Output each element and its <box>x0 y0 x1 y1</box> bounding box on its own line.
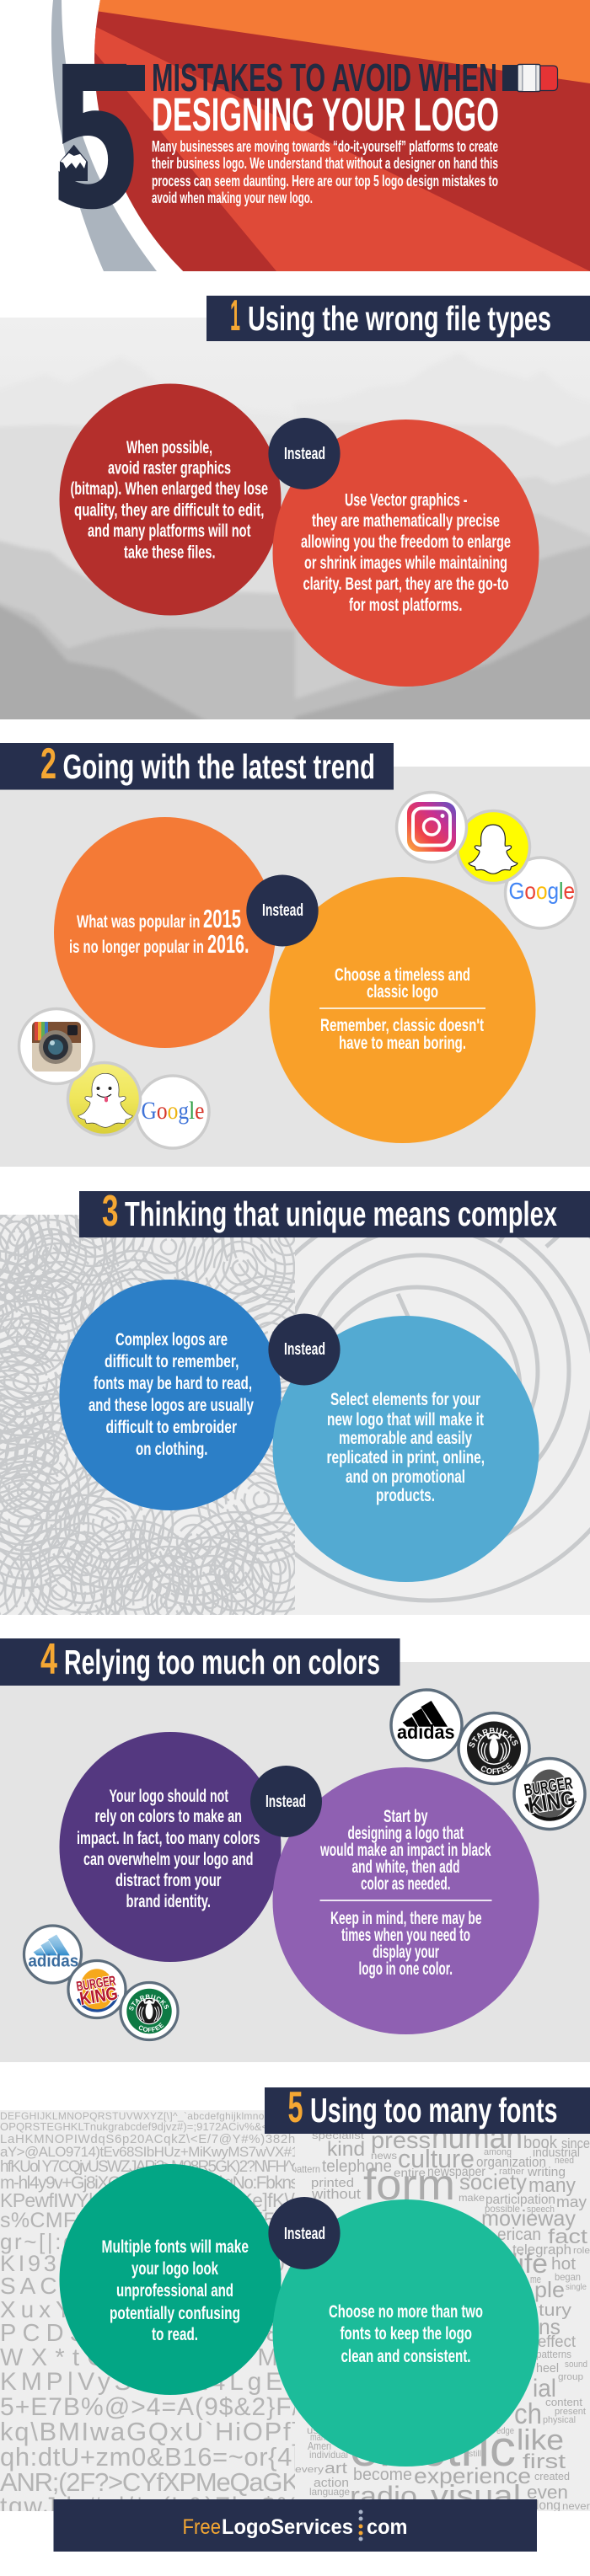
mistake text <box>69 904 249 959</box>
instead badge <box>268 418 341 489</box>
typography background: PCDS/KLhY5rGv8e <box>0 2320 299 2347</box>
heading banner: 4 <box>40 1635 57 1684</box>
icon: current google logo <box>506 858 577 928</box>
typography background: art <box>324 2460 347 2477</box>
typography background: s%CMF>GWLv|@x3}rS%uj5Lq <box>0 2209 299 2232</box>
typography background: industrial <box>533 2146 580 2160</box>
heading banner: 3 <box>102 1187 118 1236</box>
typography background: form <box>363 2161 455 2210</box>
icon: pencil eraser <box>502 64 558 91</box>
heading banner <box>79 1187 590 1237</box>
typography background: present <box>555 2407 586 2417</box>
typography background: XuxYaks"F2mW9pVd <box>0 2296 299 2322</box>
circle: solution <box>273 2199 539 2466</box>
panel: mistake 1 wrong file types <box>0 291 590 733</box>
typography background: individual <box>309 2449 348 2461</box>
typography background: edge <box>496 2426 514 2436</box>
icon: current snapchat logo <box>457 810 529 883</box>
typography background: hot <box>551 2255 576 2274</box>
typography background: single <box>566 2283 587 2292</box>
typography background: visual <box>431 2478 521 2513</box>
icon: colour starbucks <box>119 1981 180 2042</box>
typography background: KI93|/R$um7bQw2Yx0s <box>0 2251 299 2276</box>
typography background: news <box>371 2150 397 2162</box>
footer brand bar: LogoServices <box>222 2515 353 2539</box>
typography background: tqwJdc#g|/*u(L&)Zko$% <box>0 2493 299 2520</box>
typography background: organization <box>476 2154 546 2170</box>
solution text <box>327 1390 485 1505</box>
mistake text: (bitmap). When enlarged they lose <box>71 479 268 499</box>
typography background: like <box>517 2424 564 2456</box>
solution text <box>329 2302 483 2366</box>
icon: black and white starbucks: COFFEE <box>480 1762 512 1774</box>
solution text: Remember, classic doesn't <box>320 1016 484 1035</box>
heading banner: Going with the latest trend <box>62 747 375 786</box>
typography background: WX*tOn3QjBf7Mu <box>0 2344 299 2371</box>
panel: mistake 2 latest trend <box>0 740 590 1167</box>
instead badge: Instead <box>284 2225 325 2243</box>
typography background: ch <box>514 2398 542 2430</box>
heading banner <box>206 291 590 341</box>
typography background: every <box>295 2465 324 2475</box>
icon: current instagram logo <box>396 792 467 863</box>
circle: solution <box>270 877 536 1143</box>
typography background: ial <box>533 2375 556 2402</box>
instead badge <box>268 2197 341 2269</box>
typography background: 5+E7B%@>4=A(9$&2}F/ <box>0 2393 300 2421</box>
typography background: experience <box>414 2463 531 2488</box>
typography background: began <box>555 2271 581 2283</box>
icon: black and white adidas: adidas <box>397 1721 455 1743</box>
solution text: memorable and easily <box>339 1429 472 1448</box>
circle: mistake <box>59 1732 282 1962</box>
mistake text: difficult to embroider <box>106 1418 237 1437</box>
solution text: fonts to keep the logo <box>341 2324 472 2344</box>
typography background: me <box>530 2273 541 2285</box>
typography background: us <box>307 2424 319 2436</box>
typography background: writing <box>527 2165 566 2179</box>
solution text: products. <box>376 1486 435 1505</box>
typography background: never <box>562 2500 590 2512</box>
icon: old instagram logo <box>19 1009 94 1083</box>
typography background: telephone <box>322 2157 392 2176</box>
solution text: have to mean boring. <box>339 1034 466 1053</box>
typography background: LaHKMNOPIWdqS6p20ACqkZ\<E/7@Y#%)382ht <box>0 2132 300 2146</box>
solution text <box>319 1807 492 1979</box>
mistake text: avoid raster graphics <box>108 458 231 478</box>
section background <box>0 767 590 1167</box>
mistake text <box>101 2237 249 2344</box>
typography background: DEFGHIJKLMNOPQRSTUVWXYZ[\]^_`abcdefghijklmnopqrstuv <box>0 2110 299 2122</box>
typography background: content <box>545 2396 582 2408</box>
intro paragraph: avoid when making your new logo. <box>152 189 313 206</box>
icon: black and white starbucks: STARBUCKS <box>469 1728 518 1748</box>
mistake text: your logo look <box>131 2259 218 2279</box>
circle: mistake <box>54 817 276 1048</box>
typography background: among <box>484 2147 512 2157</box>
panel: header <box>48 0 590 286</box>
typography background <box>0 2110 590 2520</box>
decorative grey arc <box>51 0 157 271</box>
typography background: rather <box>499 2167 524 2177</box>
typography background: may <box>556 2194 587 2210</box>
typography background: role <box>573 2246 590 2256</box>
typography background: effect <box>538 2333 577 2351</box>
icon: black and white burger king: KING <box>527 1786 577 1818</box>
mistake text: 2016. <box>207 929 249 959</box>
mistake text: and these logos are usually <box>88 1396 254 1415</box>
instead badge <box>246 874 319 947</box>
typography background: Ameri <box>308 2440 331 2452</box>
mistake text: fonts may be hard to read, <box>94 1374 252 1393</box>
typography background: patterns <box>536 2348 571 2360</box>
typography background: become <box>353 2466 412 2484</box>
typography background: human <box>432 2120 523 2156</box>
mistake text <box>77 1787 260 1911</box>
solution text: they are mathematically precise <box>312 511 500 531</box>
mistake text: to read. <box>152 2325 198 2344</box>
typography background: culture <box>398 2144 475 2173</box>
typography background: still <box>469 2450 481 2459</box>
icon: old snapchat logo <box>67 1063 140 1136</box>
typography background: entire <box>394 2166 426 2179</box>
panel: mistake 4 relying on colors <box>0 1635 590 2062</box>
typography background: tury <box>539 2301 571 2320</box>
solution text: clean and consistent. <box>341 2347 470 2366</box>
solution text: Use Vector graphics - <box>345 490 468 510</box>
icon: black and white burger king <box>514 1759 585 1830</box>
heading banner: 1 <box>230 291 240 340</box>
typography background: even <box>527 2482 568 2503</box>
typography background: possible <box>485 2203 520 2215</box>
mistake text: rely on colors to make an <box>94 1807 242 1826</box>
solution text: logo in one color. <box>359 1959 453 1979</box>
icon: colour burger king: BURGER <box>75 1973 117 1995</box>
solution text: classic logo <box>367 982 438 1002</box>
mistake text: and many platforms will not <box>88 521 251 541</box>
typography background: telegraph <box>512 2242 571 2258</box>
instead badge: Instead <box>262 901 303 920</box>
panel: mistake 3 unique means complex <box>0 1191 590 1615</box>
solution text: Keep in mind, there may be <box>330 1909 482 1928</box>
title <box>152 56 499 141</box>
typography background: SAC\1<B}kN4oTjf6Zq <box>0 2273 299 2299</box>
typography background: kind <box>327 2138 365 2161</box>
ring pattern background <box>0 1215 590 1615</box>
solution text: designing a logo that <box>347 1824 464 1843</box>
mistake text: Complex logos are <box>115 1330 228 1349</box>
typography background: society <box>459 2169 527 2194</box>
footer brand bar: com <box>367 2515 408 2539</box>
icon: colour burger king: KING <box>78 1982 119 2009</box>
circle: solution <box>273 1316 539 1582</box>
typography background: first <box>523 2450 566 2473</box>
mistake text: 2015 <box>203 904 241 933</box>
heading banner <box>265 2083 590 2134</box>
typography background: movieway <box>481 2205 576 2231</box>
typography background: qh:dtU+zm0&B16=~or{4| <box>0 2442 299 2472</box>
typography background: life <box>512 2248 548 2279</box>
solution text: Choose no more than two <box>329 2302 483 2322</box>
mistake text <box>71 438 268 563</box>
mistake text: quality, they are difficult to edit, <box>74 500 265 521</box>
heading banner: Relying too much on colors <box>64 1643 380 1681</box>
mistake text: Multiple fonts will make <box>101 2237 249 2257</box>
typography background: pattern <box>292 2163 320 2175</box>
mistake text: on clothing. <box>136 1440 207 1459</box>
mistake text: potentially confusing <box>110 2304 240 2323</box>
heading banner <box>0 740 394 790</box>
icon: old google logo: Google <box>142 1097 204 1125</box>
big number 5 with pencil tip: 5 <box>48 26 143 254</box>
footer brand bar: Free <box>182 2515 221 2539</box>
typography background: need <box>555 2156 574 2166</box>
typography background: group <box>558 2372 583 2382</box>
typography background: kq\BMIwaGQxU`HiOPf] <box>0 2417 299 2446</box>
typography background: aY>@ALO9714)tEv68SIbHUz+MiKwyMS7wVX#1 <box>0 2144 299 2160</box>
icon: colour burger king <box>68 1960 126 2018</box>
typography background: m-hl4y9v+Gj8iXCDHB6=T2&5a/\qNo:Fbkns <box>0 2173 299 2193</box>
circle: mistake <box>59 1280 282 1510</box>
typography background: KMP|VySa>o&4LgEc <box>0 2368 299 2396</box>
solution text: Select elements for your <box>330 1390 480 1409</box>
misty mountain background <box>0 318 590 733</box>
typography background: specialist <box>312 2130 365 2141</box>
instead badge <box>250 1766 322 1837</box>
intro paragraph <box>152 137 498 206</box>
typography background: fact <box>548 2226 587 2248</box>
footer brand bar <box>54 2499 537 2552</box>
typography background: make <box>459 2192 485 2204</box>
instead badge <box>268 1314 341 1385</box>
solution text: and on promotional <box>346 1467 465 1487</box>
instead badge: Instead <box>266 1793 306 1811</box>
typography background: heel <box>536 2361 559 2376</box>
mistake text <box>88 1330 254 1459</box>
typography background: electric <box>350 2420 516 2477</box>
typography background: ple <box>534 2277 565 2302</box>
typography background: many <box>528 2174 576 2197</box>
typography background: without <box>311 2186 361 2202</box>
mistake text: can overwhelm your logo and <box>83 1850 253 1869</box>
icon: colour starbucks: COFFEE <box>138 2023 164 2032</box>
solution text <box>319 965 485 1053</box>
heading banner <box>0 1635 400 1686</box>
mistake text: take these files. <box>124 542 216 563</box>
circle: mistake <box>59 384 282 615</box>
panel: mistake 5 too many fonts <box>0 2083 590 2520</box>
typography background: OPQRSTEGHKLTnukgrabcdef9djvz#)=;9172ACiv%&<>?U[X <box>0 2120 299 2133</box>
typography background: hfKUol Y7CQjvUSWZJAPi3>M98R5GK)2?N\FH^c <box>0 2158 299 2176</box>
typography background: language <box>309 2486 350 2498</box>
solution text: display your <box>373 1943 439 1962</box>
typography background: physical <box>543 2415 576 2425</box>
icon: old google logo <box>137 1076 209 1148</box>
heading banner: 5 <box>288 2083 303 2132</box>
circle: solution <box>273 1767 539 2034</box>
sunburst background circle <box>84 0 590 286</box>
icon: black and white starbucks <box>457 1712 531 1786</box>
solution text: times when you need to <box>341 1926 470 1945</box>
typography background: printed <box>311 2176 354 2190</box>
icon: colour adidas: adidas <box>28 1953 78 1971</box>
icon: current google logo: Google <box>509 878 575 904</box>
typography background: action <box>314 2476 349 2490</box>
mistake text: Your logo should not <box>110 1787 228 1806</box>
icon: colour starbucks: STARBUCKS <box>129 1995 169 2011</box>
circle: mistake <box>59 2164 282 2395</box>
solution text: color as needed. <box>361 1874 450 1894</box>
typography background: long <box>536 2499 560 2513</box>
mistake text: unprofessional and <box>116 2281 233 2301</box>
mistake text: difficult to remember, <box>105 1352 239 1371</box>
solution text: and white, then add <box>352 1857 460 1877</box>
solution text: new logo that will make it <box>327 1410 484 1430</box>
typography background: press <box>371 2127 431 2153</box>
solution text: for most platforms. <box>349 596 462 615</box>
instead badge: Instead <box>284 445 325 463</box>
typography background: book <box>523 2134 558 2152</box>
typography background: ns <box>539 2314 560 2339</box>
typography background: newspaper <box>427 2165 486 2179</box>
typography background: participation <box>485 2193 555 2207</box>
typography background: ANR;(2F?>CYfXPMeQaGK <box>0 2467 299 2497</box>
mistake text: brand identity. <box>126 1892 211 1911</box>
solution text: Choose a timeless and <box>335 965 470 985</box>
mistake text: is no longer popular in <box>69 938 204 957</box>
solution text: Start by <box>384 1807 428 1826</box>
typography background: gr~[|:d$;>\Dw8FhZ|7mPn! <box>0 2229 299 2254</box>
section background <box>0 1662 590 2062</box>
circle: solution <box>273 420 539 687</box>
mistake text: distract from your <box>115 1871 221 1890</box>
typography background: sound <box>565 2360 587 2370</box>
solution text: replicated in print, online, <box>327 1448 485 1467</box>
typography background: created <box>534 2470 570 2482</box>
icon: colour adidas <box>24 1926 82 1983</box>
solution text <box>301 490 511 615</box>
mistake text: impact. In fact, too many colors <box>77 1829 260 1848</box>
mistake text: What was popular in <box>77 912 201 932</box>
instead badge: Instead <box>284 1340 325 1359</box>
mistake text: When possible, <box>126 438 212 457</box>
typography background: man <box>310 2431 325 2443</box>
typography background: speech <box>527 2205 555 2215</box>
heading banner: 2 <box>40 740 56 788</box>
typography background: KPewfIWY|G8|X~#oRTJgk<hKe]fK\/| <box>0 2189 299 2211</box>
typography background: erican <box>497 2226 541 2244</box>
icon: black and white adidas <box>391 1690 462 1761</box>
typography background: radio <box>350 2481 417 2511</box>
solution text: would make an impact in black <box>319 1841 491 1860</box>
solution text: clarity. Best part, they are the go-to <box>303 575 509 594</box>
